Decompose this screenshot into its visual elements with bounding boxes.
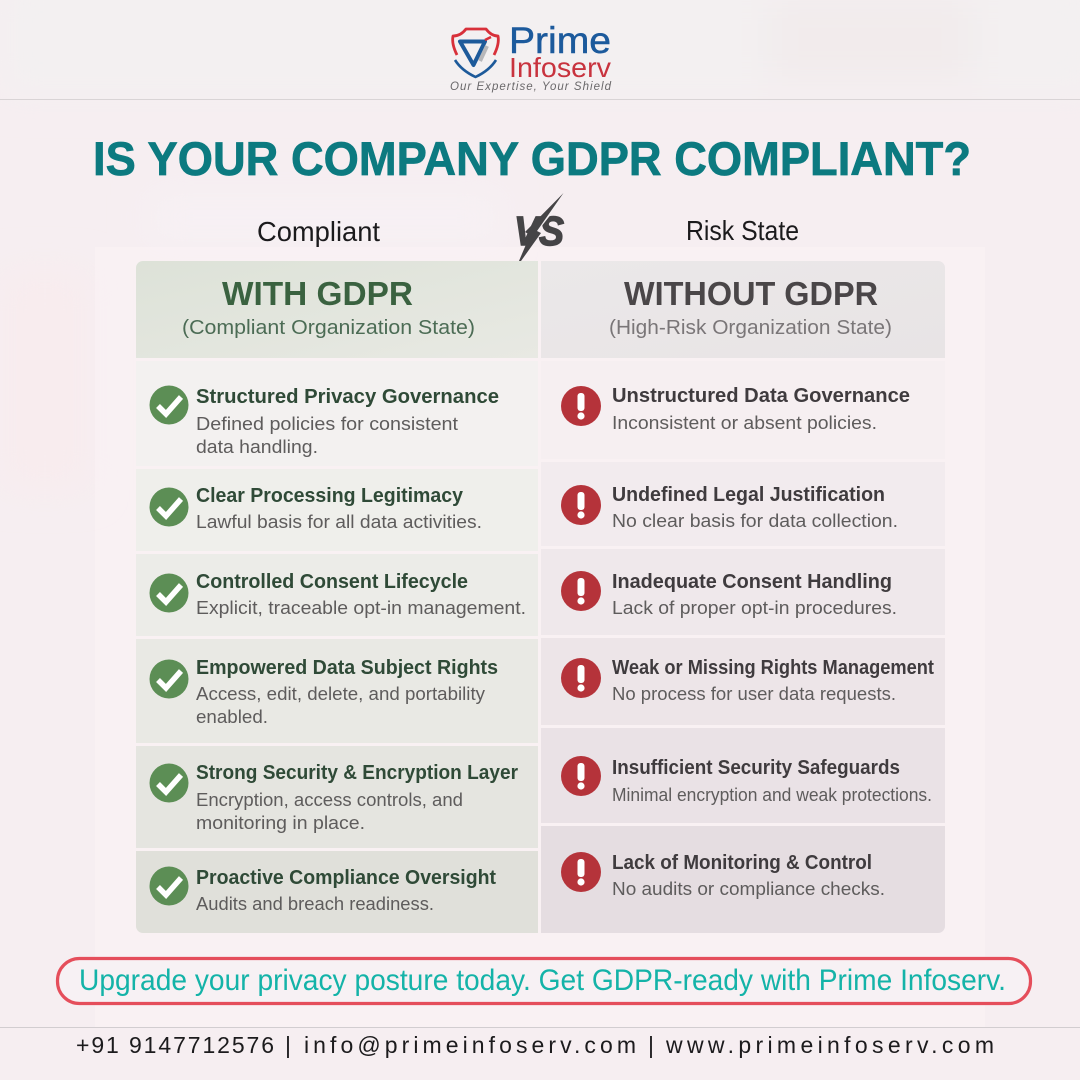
call to action	[58, 958, 1030, 1004]
title: IS YOUR COMPANY GDPR COMPLIANT?	[93, 132, 971, 185]
panel: with GDPR	[136, 261, 538, 933]
row: Proactive Compliance Oversight: Audits and breach readiness.	[196, 893, 434, 914]
row: Lack of Monitoring & Control: No audits or compliance checks.	[612, 878, 885, 899]
row: Undefined Legal Justification: No clear basis for data collection.	[612, 510, 898, 531]
row: Controlled Consent Lifecycle	[136, 554, 538, 636]
footer contact line: www.primeinfoserv.com	[665, 1032, 994, 1058]
row: Lack of Monitoring & Control	[541, 826, 945, 933]
column header: with GDPR: (Compliant Organization State)	[182, 317, 475, 339]
footer contact line: |	[648, 1032, 654, 1058]
row: Strong Security & Encryption Layer: Encryption, access controls, and	[196, 789, 463, 810]
row: Empowered Data Subject Rights: Access, edit, delete, and portability	[196, 683, 486, 704]
footer contact line: +91 9147712576	[76, 1032, 274, 1058]
brand name: Infoserv: Infoserv	[509, 52, 611, 83]
brand name: Prime: Prime	[509, 20, 611, 61]
icon: VS badge	[514, 193, 564, 268]
row: Strong Security & Encryption Layer: monitoring in place.	[196, 812, 365, 833]
icon: shield	[453, 29, 498, 77]
row: Structured Privacy Governance: data handling.	[196, 436, 318, 457]
column header: without GDPR: WITHOUT GDPR	[624, 275, 878, 312]
row: Proactive Compliance Oversight: Proactive Compliance Oversight	[196, 866, 496, 889]
row: Structured Privacy Governance	[136, 361, 538, 466]
row: Strong Security & Encryption Layer	[136, 746, 538, 848]
column header: without GDPR	[541, 261, 945, 358]
row: Clear Processing Legitimacy	[136, 469, 538, 551]
row: Unstructured Data Governance: Unstructured Data Governance	[612, 384, 910, 407]
row: Structured Privacy Governance: Defined policies for consistent	[196, 413, 458, 434]
row: Structured Privacy Governance: Structured Privacy Governance	[196, 385, 499, 408]
row: Proactive Compliance Oversight	[136, 851, 538, 933]
row: Insufficient Security Safeguards	[541, 728, 945, 823]
row: Controlled Consent Lifecycle: Controlled Consent Lifecycle	[196, 570, 468, 593]
row: Undefined Legal Justification: Undefined Legal Justification	[612, 483, 885, 506]
row: Unstructured Data Governance: Inconsistent or absent policies.	[612, 412, 877, 433]
footer contact line: info@primeinfoserv.com	[304, 1032, 636, 1058]
row: Weak or Missing Rights Management: Weak or Missing Rights Management	[612, 656, 934, 679]
footer contact line	[76, 1032, 994, 1058]
row: Empowered Data Subject Rights: Empowered Data Subject Rights	[196, 656, 498, 679]
label: Risk State: Risk State	[686, 215, 799, 246]
row: Controlled Consent Lifecycle: Explicit, traceable opt-in management.	[196, 597, 526, 618]
row: Clear Processing Legitimacy: Lawful basis for all data activities.	[196, 511, 482, 532]
footer contact line: |	[285, 1032, 291, 1058]
row: Empowered Data Subject Rights: enabled.	[196, 706, 268, 727]
column header: without GDPR: (High-Risk Organization State)	[609, 317, 892, 339]
row: Lack of Monitoring & Control: Lack of Monitoring & Control	[612, 851, 872, 874]
icon: VS badge: VS	[514, 208, 564, 254]
logo: Prime Infoserv	[450, 20, 612, 93]
row: Insufficient Security Safeguards: Minimal encryption and weak protections.	[612, 784, 932, 805]
label: Compliant: Compliant	[257, 216, 380, 247]
row: Inadequate Consent Handling: Lack of proper opt-in procedures.	[612, 597, 897, 618]
row: Inadequate Consent Handling	[541, 549, 945, 635]
tagline: Our Expertise, Your Shield	[450, 81, 612, 93]
row: Strong Security & Encryption Layer: Strong Security & Encryption Layer	[196, 761, 518, 784]
row: Inadequate Consent Handling: Inadequate Consent Handling	[612, 570, 892, 593]
row: Insufficient Security Safeguards: Insufficient Security Safeguards	[612, 756, 900, 779]
column header: with GDPR	[136, 261, 538, 358]
row: Unstructured Data Governance	[541, 361, 945, 459]
row: Empowered Data Subject Rights	[136, 639, 538, 743]
row: Undefined Legal Justification	[541, 462, 945, 546]
row: Weak or Missing Rights Management	[541, 638, 945, 725]
column header: with GDPR: WITH GDPR	[222, 275, 413, 312]
call to action: Upgrade your privacy posture today. Get GDPR-ready with Prime Infoserv.	[79, 964, 1006, 997]
row: Weak or Missing Rights Management: No process for user data requests.	[612, 683, 896, 704]
row: Clear Processing Legitimacy: Clear Processing Legitimacy	[196, 484, 464, 507]
panel: without GDPR	[541, 261, 945, 933]
